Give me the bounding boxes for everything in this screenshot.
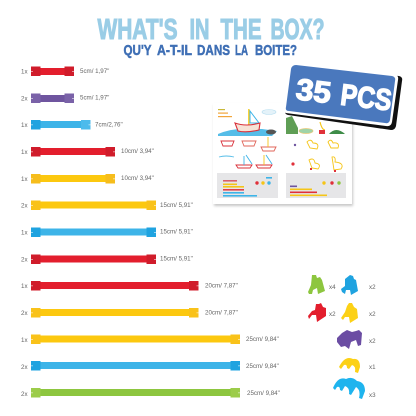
tube row: 2x 20cm yellow — [21, 308, 238, 318]
tube row: 2x 15cm red: 15cm/ 5,91" — [160, 256, 193, 262]
tube row: 1x 10cm red: 10cm/ 3,94" — [121, 148, 154, 155]
connector piece: blue x2: x2 — [369, 284, 376, 291]
tube row: 1x 7cm blue: 1x — [21, 122, 28, 129]
tube row: 2x 25cm green: 2x — [21, 391, 28, 398]
booklet: sailboat parts panel — [217, 173, 278, 198]
tube row: 1x 20cm red: 20cm/ 7,87" — [205, 282, 238, 290]
connector piece: yellow x1: x1 — [369, 364, 376, 371]
subtitle: A-T-IL — [157, 42, 192, 59]
connector piece: purple x2: x2 — [369, 338, 376, 345]
connector piece: red x2: x2 — [329, 311, 336, 318]
tube row: 1x 15cm blue: 1x — [21, 230, 28, 236]
subtitle — [124, 42, 297, 59]
tube row: 2x 5cm purple: 5cm/ 1,97" — [80, 94, 109, 102]
tube row: 1x 20cm red: 1x — [21, 283, 28, 290]
tube row: 2x 15cm red — [21, 254, 193, 264]
tube row: 1x 25cm yellow — [21, 334, 279, 344]
connector piece: blue x2 — [341, 275, 376, 295]
title — [98, 14, 324, 46]
connector piece: green x4: x4 — [329, 284, 336, 291]
tube row: 1x 10cm red: 1x — [21, 149, 28, 156]
tube row: 1x 10cm yellow — [21, 174, 154, 184]
tube row: 2x 25cm green — [21, 388, 280, 398]
tube row: 1x 7cm blue — [21, 120, 123, 130]
tube row: 1x 5cm red — [21, 66, 109, 76]
booklet: duck parts panel — [286, 173, 346, 198]
connector piece: purple x2 — [337, 330, 376, 349]
tube row: 2x 20cm yellow: 20cm/ 7,87" — [205, 310, 238, 316]
connector piece: green x4 — [308, 275, 336, 294]
badge text — [294, 73, 393, 118]
badge text: PCS — [339, 79, 393, 118]
tube row: 2x 5cm purple — [21, 94, 109, 103]
tube row: 1x 10cm yellow: 1x — [21, 176, 28, 183]
instruction booklet — [213, 103, 353, 206]
connector piece: red x2 — [308, 303, 336, 322]
tube row: 1x 15cm blue: 15cm/ 5,91" — [160, 228, 193, 236]
connector piece: yellow x2: x2 — [369, 311, 376, 318]
tube row: 1x 25cm yellow: 25cm/ 9,84" — [246, 336, 279, 343]
tube row: 2x 15cm yellow: 15cm/ 5,91" — [160, 202, 193, 209]
tube row: 2x 25cm blue — [21, 361, 279, 371]
tube row: 2x 25cm blue: 25cm/ 9,84" — [246, 363, 279, 370]
tube row: 1x 5cm red: 5cm/ 1,97" — [80, 68, 109, 75]
badge text: 35 — [294, 73, 333, 110]
subtitle: BOITE? — [255, 42, 297, 59]
connector piece: yellow x1 — [339, 358, 376, 373]
tube row: 2x 15cm yellow: 2x — [21, 202, 28, 210]
subtitle: QU'Y — [124, 42, 152, 59]
tube row: 1x 10cm red — [21, 147, 154, 156]
tube row: 1x 15cm blue — [21, 228, 193, 237]
booklet: sailboat illustration — [218, 109, 277, 136]
connector piece: yellow x2 — [341, 303, 376, 323]
subtitle: LA — [235, 42, 248, 59]
badge: 35 PCS — [282, 62, 402, 130]
connector piece: blue x3: x3 — [369, 392, 376, 399]
title: WHAT'S — [98, 14, 178, 46]
title: THE — [220, 14, 262, 46]
booklet: duck illustration — [286, 116, 345, 134]
tube row: 1x 20cm red — [21, 281, 238, 290]
tube row: 2x 25cm green: 25cm/ 9,84" — [247, 390, 280, 397]
connector piece: blue x3 — [333, 378, 376, 399]
booklet: duck steps — [291, 140, 342, 172]
tube row: 1x 25cm yellow: 1x — [21, 337, 28, 344]
tube row: 1x 5cm red: 1x — [21, 68, 28, 76]
tube row: 1x 10cm yellow: 10cm/ 3,94" — [121, 175, 154, 182]
tube row: 2x 15cm red: 2x — [21, 256, 28, 264]
tube row: 2x 5cm purple: 2x — [21, 96, 28, 102]
booklet: sailboat steps — [219, 137, 276, 168]
tube row: 1x 7cm blue: 7cm/2,76" — [95, 122, 123, 128]
title: BOX? — [270, 14, 324, 46]
title: IN — [190, 14, 210, 46]
tube row: 2x 15cm yellow — [21, 200, 193, 210]
tube row: 2x 25cm blue: 2x — [21, 364, 28, 371]
subtitle: DANS — [197, 42, 230, 59]
tube row: 2x 20cm yellow: 2x — [21, 310, 28, 317]
